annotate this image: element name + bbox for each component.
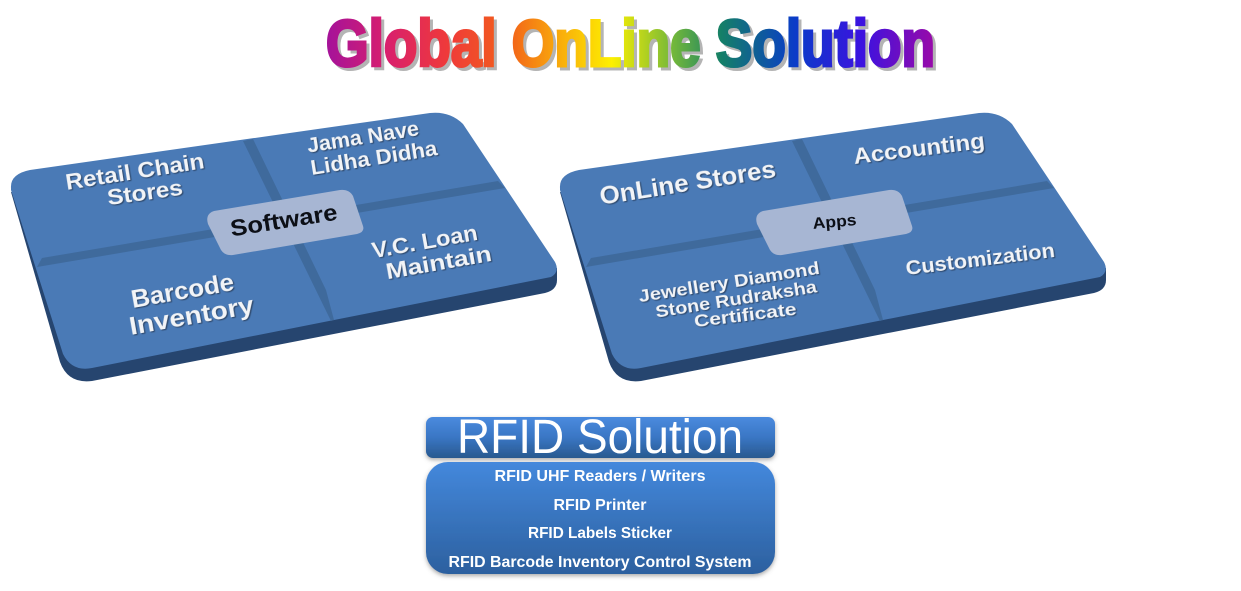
quadrant: Barcode Inventory	[127, 268, 256, 341]
panel: apps	[560, 113, 1106, 381]
quadrant: Jewellery Diamond Stone Rudraksha Certificate: Certificate	[693, 299, 798, 331]
RFID list: RFID Printer	[554, 497, 646, 514]
center label: apps: Apps	[812, 212, 857, 233]
card base: apps	[560, 192, 1106, 381]
quadrant: Jewellery Diamond Stone Rudraksha Certificate	[637, 258, 821, 331]
quadrant: Customization: Customization	[904, 239, 1056, 280]
quadrant: Jama Nave Lidha Didha: Lidha Didha	[309, 137, 439, 180]
card base: software	[11, 192, 557, 381]
quadrant: Jama Nave Lidha Didha: Jama Nave	[305, 117, 421, 158]
quadrant: Retail Chain Stores	[64, 148, 206, 210]
quadrant: V.C. Loan Maintain	[370, 220, 494, 284]
panel: RFID solution	[426, 411, 775, 574]
RFID list: RFID Barcode Inventory Control System	[448, 554, 752, 571]
quadrant: Jama Nave Lidha Didha	[305, 117, 439, 180]
quadrant: Retail Chain Stores: Retail Chain	[64, 148, 206, 195]
card face: software	[11, 113, 557, 369]
RFID header: RFID Solution	[457, 411, 743, 464]
quadrant: Accounting: Accounting	[852, 128, 986, 169]
quadrant: V.C. Loan Maintain: V.C. Loan	[370, 220, 480, 263]
title: Global OnLine Solution	[329, 9, 938, 83]
quadrant: Barcode Inventory: Barcode	[129, 268, 236, 314]
dividers: software	[37, 139, 505, 321]
quadrant: OnLine Stores: OnLine Stores	[598, 155, 778, 211]
card face: apps	[560, 113, 1106, 369]
center label: software	[207, 190, 363, 255]
panel: software	[11, 113, 557, 381]
quadrant: Retail Chain Stores: Stores	[106, 175, 184, 210]
quadrant: Barcode Inventory: Inventory	[127, 291, 256, 341]
dividers: apps	[586, 139, 1054, 321]
RFID list: RFID UHF Readers / Writers	[494, 468, 706, 485]
quadrant: Jewellery Diamond Stone Rudraksha Certificate: Stone Rudraksha	[654, 276, 818, 322]
RFID list	[426, 462, 775, 574]
title: Global OnLine Solution	[326, 6, 935, 80]
quadrant: V.C. Loan Maintain: Maintain	[384, 241, 494, 284]
center label: software: Software	[228, 199, 339, 241]
RFID list: RFID Labels Sticker	[528, 525, 672, 542]
center label: apps	[756, 190, 912, 255]
quadrant: Jewellery Diamond Stone Rudraksha Certificate: Jewellery Diamond	[637, 258, 821, 306]
